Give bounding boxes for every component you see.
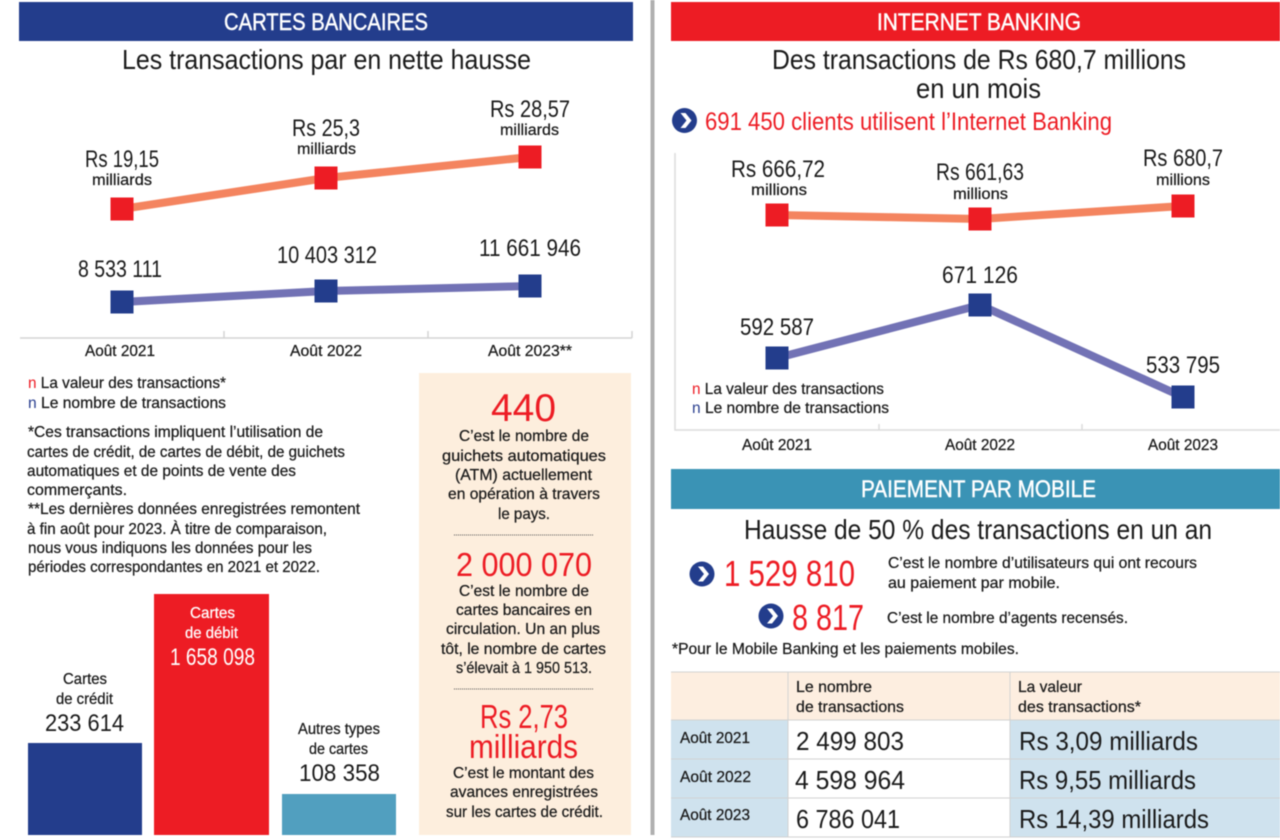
panel: paiement par mobile (671, 469, 1280, 837)
table: transactions mobiles: Rs 3,09 milliards (1019, 726, 1198, 756)
chart title: Des transactions de Rs 680,7 millions (772, 44, 1186, 75)
stat: 440: le pays. (498, 506, 550, 523)
line chart: internet banking: millions (751, 182, 807, 199)
bar: cartes de débit (154, 594, 269, 835)
bar: cartes de crédit: 233 614 (45, 710, 124, 737)
bar: autres types de cartes: de cartes (309, 741, 368, 758)
legend (28, 375, 226, 412)
panel: internet banking (671, 2, 1280, 454)
legend (692, 381, 889, 417)
line chart: cartes bancaires: Août 2022 (290, 343, 362, 360)
table: transactions mobiles: 4 598 964 (795, 765, 905, 795)
icon: chevron bullet (690, 562, 714, 586)
line chart: cartes bancaires: Rs 19,15 (85, 146, 159, 173)
footnote: *Pour le Mobile Banking et les paiements mobiles. (672, 641, 1019, 658)
line chart: cartes bancaires: milliards (500, 122, 559, 139)
stat: 2 000 070: cartes bancaires en (456, 602, 592, 619)
line chart: internet banking (675, 145, 1280, 454)
table: transactions mobiles: Rs 14,39 milliards (1019, 804, 1209, 834)
footnotes (27, 424, 361, 576)
stat: Rs 2,73 milliards (446, 698, 603, 821)
footnotes: périodes correspondantes en 2021 et 2022. (28, 559, 320, 576)
bar chart: types de cartes (28, 594, 396, 835)
legend: n La valeur des transactions (692, 381, 884, 398)
footnotes: **Les dernières données enregistrées remontent (28, 501, 361, 518)
stat: 2 000 070: C’est le nombre de (459, 583, 589, 600)
chart title (772, 44, 1186, 104)
line chart: internet banking: Rs 680,7 (1143, 145, 1223, 172)
line chart: cartes bancaires (20, 96, 632, 360)
stat: 440: 440 (491, 387, 556, 430)
bar: cartes de débit: 1 658 098 (170, 644, 255, 671)
line chart: internet banking: Août 2022 (945, 437, 1015, 454)
stat: utilisateurs: C’est le nombre d’utilisateurs qui ont recours (888, 555, 1197, 572)
footnotes: commerçants. (27, 482, 127, 499)
line chart: cartes bancaires: Août 2023** (488, 343, 572, 360)
chart title: en un mois (916, 73, 1041, 104)
bar: autres types de cartes: Autres types (298, 721, 380, 738)
legend: n Le nombre de transactions (692, 400, 889, 417)
table: transactions mobiles: La valeur (1018, 679, 1083, 696)
stat: utilisateurs: 1 529 810 (724, 553, 855, 594)
icon: chevron bullet (672, 108, 697, 133)
table: transactions mobiles (671, 672, 1280, 837)
stat: 440 (442, 387, 606, 523)
line chart: internet banking: 533 795 (1146, 352, 1220, 379)
stat: Rs 2,73 milliards: C’est le montant des (453, 765, 594, 782)
line chart: cartes bancaires: Rs 25,3 (292, 115, 360, 142)
line chart: internet banking: Rs 661,63 (936, 159, 1024, 186)
line chart: internet banking: Rs 666,72 (731, 156, 825, 183)
bar: cartes de crédit: Cartes (63, 671, 107, 688)
stat: 440: en opération à travers (448, 486, 600, 503)
line chart: cartes bancaires: milliards (297, 141, 356, 158)
line chart: internet banking: 592 587 (740, 314, 814, 341)
heading: internet banking: INTERNET BANKING (877, 9, 1081, 36)
footnotes: à fin août pour 2023. À titre de comparaison, (27, 519, 327, 538)
section title: Hausse de 50 % des transactions en un an (744, 514, 1212, 545)
table: transactions mobiles: 2 499 803 (796, 726, 904, 756)
icon: chevron bullet (758, 604, 784, 628)
legend: n La valeur des transactions* (28, 375, 226, 392)
table: transactions mobiles: Le nombre (796, 679, 872, 696)
table: transactions mobiles: de transactions (796, 699, 904, 716)
bar: autres types de cartes: 108 358 (299, 760, 380, 787)
footnotes: cartes de crédit, de cartes de débit, de guichets (27, 444, 345, 461)
stat: 2 000 070: tôt, le nombre de cartes (441, 641, 606, 658)
stat: 2 000 070: s’élevait à 1 950 513. (456, 660, 592, 677)
bar: autres types de cartes (282, 721, 396, 835)
stat: 2 000 070: 2 000 070 (456, 546, 592, 583)
stat: 2 000 070 (441, 546, 606, 677)
stat: agents: 8 817 (792, 597, 864, 638)
stat: 440: guichets automatiques (442, 448, 606, 465)
line chart: cartes bancaires: 11 661 946 (479, 235, 581, 262)
stat: agents: C’est le nombre d’agents recensés. (887, 610, 1128, 627)
stat: 440: (ATM) actuellement (455, 467, 593, 484)
bar: cartes de débit: de débit (185, 625, 239, 642)
bar: cartes de crédit: de crédit (56, 691, 114, 708)
panel: chiffres clés (419, 373, 631, 835)
table: transactions mobiles: Août 2023 (680, 807, 750, 824)
stat: agents (758, 597, 1128, 638)
table: transactions mobiles: des transactions* (1018, 699, 1141, 716)
line chart: cartes bancaires: Août 2021 (85, 343, 155, 360)
stat: Rs 2,73 milliards: Rs 2,73 (480, 698, 568, 735)
table: transactions mobiles: Août 2021 (680, 730, 750, 747)
line chart: internet banking: millions (1156, 172, 1210, 189)
table: transactions mobiles: Août 2022 (680, 769, 751, 786)
bar: cartes de crédit (28, 671, 142, 835)
bar: cartes de débit: Cartes (190, 605, 235, 622)
line chart: cartes bancaires: milliards (92, 172, 152, 189)
stat: Rs 2,73 milliards: avances enregistrées (450, 784, 598, 801)
line chart: internet banking: 671 126 (942, 262, 1018, 289)
stat: utilisateurs (690, 553, 1197, 594)
table: transactions mobiles: 6 786 041 (796, 804, 900, 834)
footnotes: *Ces transactions impliquent l’utilisation de (28, 424, 323, 441)
heading: paiement par mobile (671, 469, 1280, 509)
footnotes: automatiques et de points de vente des (27, 463, 296, 480)
line chart: cartes bancaires: 10 403 312 (277, 242, 377, 269)
table: transactions mobiles: Rs 9,55 milliards (1019, 765, 1196, 795)
footnotes: nous vous indiquons les données pour les (28, 540, 312, 557)
heading: cartes bancaires: CARTES BANCAIRES (224, 9, 428, 36)
chart title: Les transactions par en nette hausse (122, 44, 531, 75)
line chart: internet banking: millions (953, 186, 1008, 203)
heading: cartes bancaires (19, 2, 633, 41)
heading: internet banking (671, 2, 1280, 41)
heading: paiement par mobile: PAIEMENT PAR MOBILE (861, 476, 1096, 503)
stat: utilisateurs: au paiement par mobile. (888, 575, 1060, 592)
stat: Rs 2,73 milliards: milliards (469, 728, 578, 765)
panel: cartes bancaires (19, 2, 633, 835)
line chart: cartes bancaires: 8 533 111 (78, 256, 162, 283)
legend: n Le nombre de transactions (28, 395, 226, 412)
callout: clients: 691 450 clients utilisent l’Internet Banking (705, 108, 1112, 136)
line chart: internet banking: Août 2023 (1148, 437, 1218, 454)
stat: 2 000 070: circulation. Un an plus (446, 621, 600, 638)
stat: 440: C’est le nombre de (459, 428, 589, 445)
line chart: internet banking: Août 2021 (742, 437, 812, 454)
stat: Rs 2,73 milliards: sur les cartes de crédit. (446, 804, 603, 821)
line chart: cartes bancaires: Rs 28,57 (490, 96, 570, 123)
